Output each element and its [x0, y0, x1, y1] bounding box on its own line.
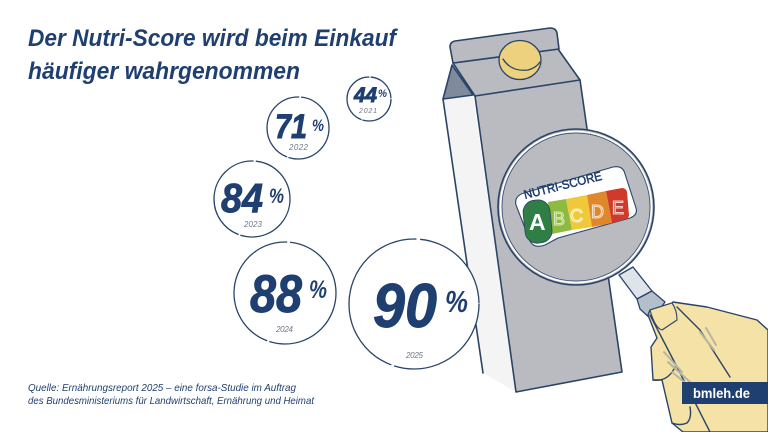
carton top flap [450, 28, 559, 63]
grade letters: C [570, 206, 583, 226]
stat 2023: 84 % [214, 161, 290, 237]
website badge: bmleh.de [693, 385, 750, 401]
stat 2025: 90 %: 90 [373, 272, 437, 341]
carton side fold [443, 65, 473, 99]
title: häufiger wahrgenommen [28, 58, 300, 85]
icon: milk carton [443, 28, 622, 392]
icon: magnifying glass handle [619, 267, 665, 320]
grade E [606, 188, 629, 223]
stat 2023: 84 %: % [269, 185, 284, 208]
carton side panel [443, 95, 516, 392]
stat 2021: 44 %: 44 [353, 84, 377, 107]
stat 2023: 84 %: 84 [221, 175, 263, 221]
stat 2025: 90 %: % [445, 284, 468, 319]
hand shading [664, 328, 716, 390]
grade D [587, 191, 612, 227]
stat 2024: 88 %: % [309, 276, 327, 304]
grade B [548, 199, 572, 234]
stat 2022: 71 %: % [312, 116, 324, 135]
icon: hand holding magnifier [648, 302, 768, 432]
grade letters: B [553, 209, 565, 229]
stat 2024: 88 %: 88 [250, 265, 302, 324]
source note: Quelle: Ernährungsreport 2025 – eine forsa-Studie im Auftrag [28, 382, 296, 394]
grade letters: D [591, 202, 604, 222]
grade C [566, 195, 592, 230]
source note [28, 382, 315, 407]
stat 2022: 71 % [267, 97, 329, 159]
stat 2021: 44 % [347, 77, 391, 121]
grade letters: E [612, 198, 624, 218]
stat 2022: 71 %: 71 [275, 108, 307, 146]
grade letters: A [529, 209, 546, 235]
label heading: NUTRI-SCORE [522, 169, 603, 202]
stat 2024: 88 %: 2024 [275, 325, 294, 334]
carton outline edges [443, 80, 622, 392]
carton front panel [475, 80, 622, 392]
icon: magnifying glass lens [498, 129, 654, 285]
carton cap [499, 40, 541, 80]
stat 2024: 88 % [234, 242, 336, 344]
stat 2025: 90 % [349, 239, 479, 369]
stat 2021: 44 %: 2021 [358, 108, 377, 115]
title [28, 25, 398, 85]
stat 2023: 84 %: 2023 [243, 220, 263, 229]
stat 2021: 44 %: % [378, 88, 387, 100]
grade A [522, 199, 553, 244]
stat 2025: 90 %: 2025 [405, 351, 424, 360]
stat 2022: 71 %: 2022 [288, 143, 309, 152]
grade letters [529, 198, 624, 235]
source note: des Bundesministeriums für Landwirtschaft, Ernährung und Heimat [28, 395, 315, 407]
title: Der Nutri-Score wird beim Einkauf [28, 25, 398, 52]
website badge [682, 382, 768, 404]
nutri-score label [516, 167, 636, 246]
carton roof [453, 49, 580, 96]
